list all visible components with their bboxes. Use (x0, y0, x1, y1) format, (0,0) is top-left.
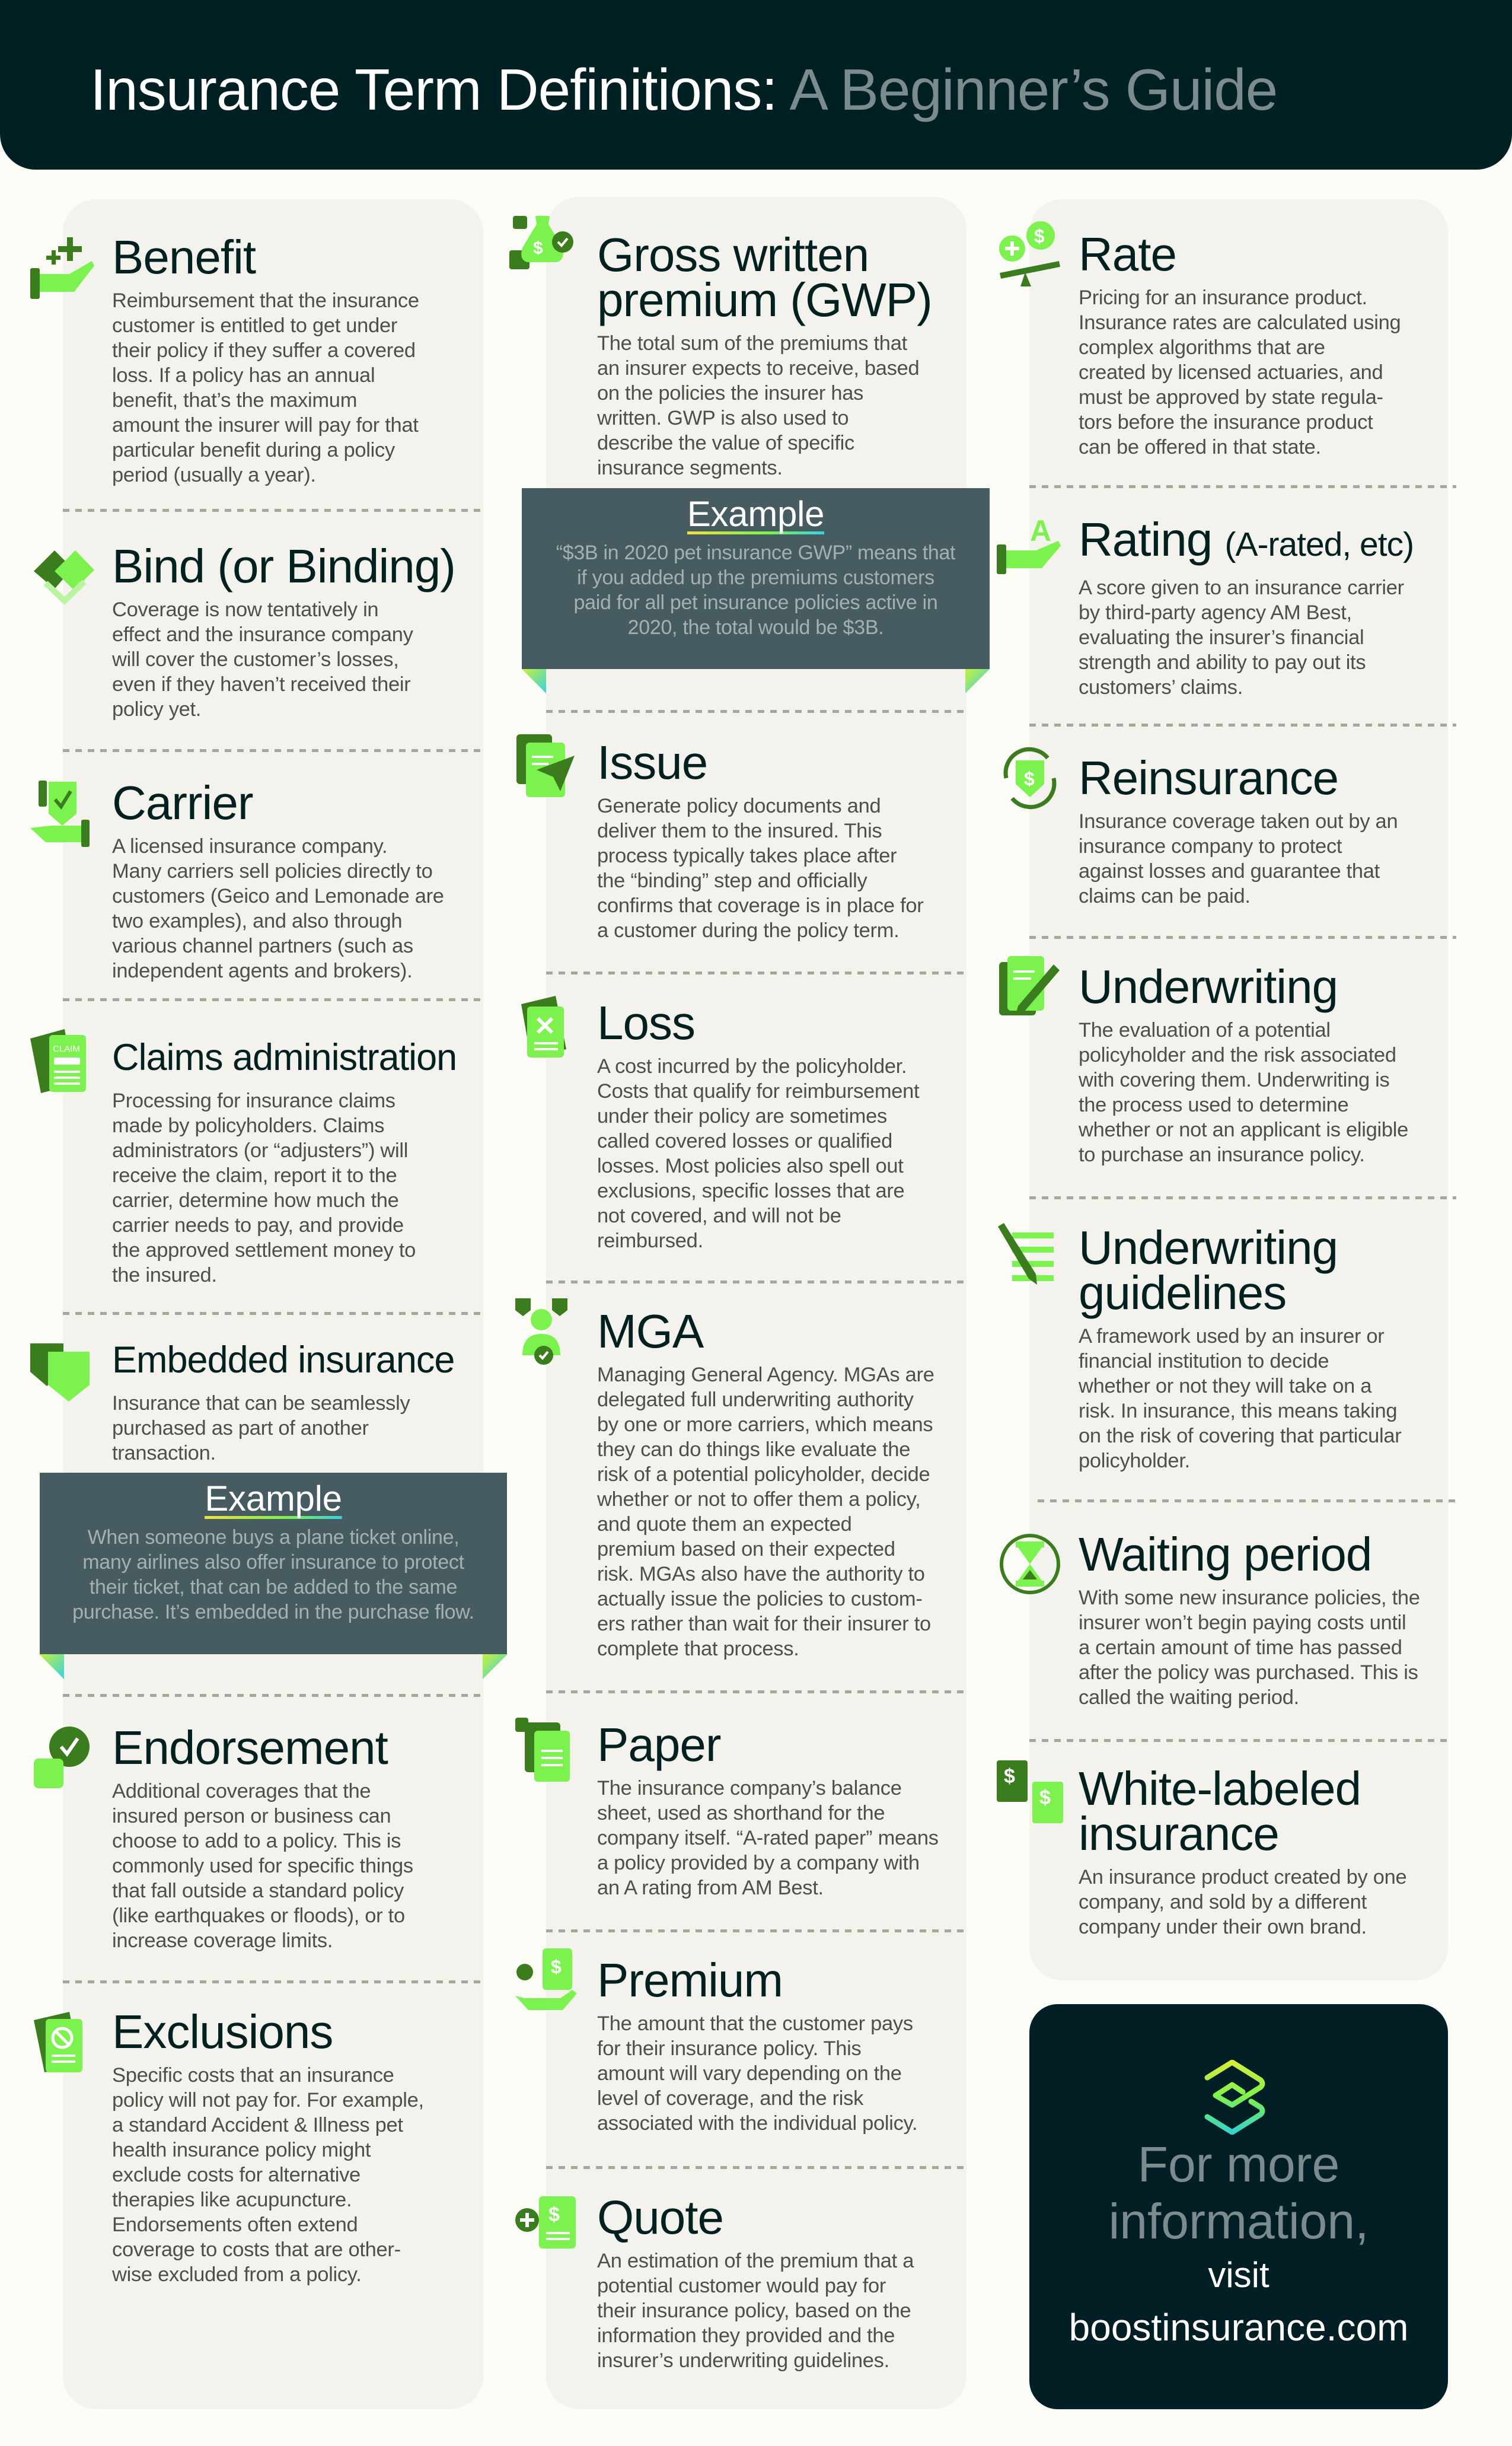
entry: Exclusions: Specific costs that an insurance (112, 2064, 394, 2087)
entry: Issue: confirms that coverage is in place for (597, 894, 923, 917)
title: Insurance Term Definitions: A Beginner’s Guide (90, 57, 1277, 122)
icon: hand with bill: $ (551, 1956, 562, 1977)
entry: Underwriting guidelines: whether or not they will take on a (1079, 1375, 1371, 1397)
text (72, 1526, 474, 1623)
entry: Rating: customers’ claims. (1079, 676, 1243, 699)
entry: Gross written premium: an insurer expects to receive, based (597, 357, 919, 380)
icon: hand with A (994, 511, 1066, 582)
text: purchase. It’s embedded in the purchase flow. (72, 1601, 474, 1623)
entry: Gross written premium: The total sum of the premiums that (597, 332, 907, 355)
icon: shields (30, 1343, 90, 1402)
entry: Gross written premium: describe the value of specific (597, 432, 854, 454)
icon: agent (515, 1298, 567, 1365)
entry: Embedded insurance: purchased as part of another (112, 1417, 369, 1439)
text: paid for all pet insurance policies active in (574, 591, 937, 614)
entry: Endorsement: choose to add to a policy. This is (112, 1830, 401, 1852)
icon: papers (515, 1718, 570, 1782)
icon: plus bill: $ (548, 2203, 560, 2226)
entry: Benefit: Benefit (112, 231, 256, 284)
entry: MGA: MGA (597, 1305, 703, 1358)
entry: Rating: Rating (A-rated, etc) (1079, 513, 1414, 566)
icon: coins scale (994, 216, 1066, 288)
icon: pen list (994, 1221, 1066, 1292)
entry: Rate: tors before the insurance product (1079, 411, 1373, 434)
entry: Loss: under their policy are sometimes (597, 1105, 887, 1128)
entry: Reinsurance: insurance company to protect (1079, 835, 1342, 858)
entry: Exclusions: therapies like acupuncture. (112, 2189, 352, 2211)
entry: Underwriting: whether or not an applicant is eligible (1079, 1119, 1408, 1141)
entry: Paper (515, 1718, 939, 1899)
entry: Claims administration: administrators (or “adjusters”) will (112, 1139, 408, 1162)
entry: Reinsurance: Reinsurance (1079, 751, 1338, 804)
entry: Carrier: A licensed insurance company. (112, 835, 387, 858)
entry: Reinsurance: claims can be paid. (1079, 885, 1251, 907)
entry: Embedded insurance: Insurance that can be seamlessly (112, 1392, 410, 1415)
text: visit: visit (1208, 2255, 1269, 2295)
icon: documents no sign (34, 2012, 82, 2072)
entry: Benefit: loss. If a policy has an annual (112, 364, 375, 387)
icon: hand with A: A (1030, 514, 1051, 547)
entry: Reinsurance: against losses and guarantee that (1079, 860, 1380, 883)
entry: Exclusions: coverage to costs that are other- (112, 2238, 401, 2261)
entry: Embedded insurance: Embedded insurance (112, 1339, 454, 1381)
entry: Endorsement: commonly used for specific things (112, 1855, 413, 1877)
entry: Claims administration: the approved settlement money to (112, 1239, 416, 1262)
entry: Reinsurance: Insurance coverage taken out by an (1079, 810, 1398, 833)
entry: Loss: reimbursed. (597, 1230, 703, 1252)
entry: Premium: level of coverage, and the risk (597, 2087, 863, 2110)
entry: Quote: potential customer would pay for (597, 2275, 886, 2297)
entry: Underwriting guidelines: financial institution to decide (1079, 1350, 1329, 1372)
entry: Paper: an A rating from AM Best. (597, 1877, 824, 1899)
entry: Claims administration: carrier, determine how much the (112, 1189, 399, 1212)
entry: Embedded insurance: transaction. (112, 1442, 216, 1464)
entry: Quote: An estimation of the premium that a (597, 2250, 914, 2272)
entry: Bind: effect and the insurance company (112, 623, 413, 646)
entry: Rate: created by licensed actuaries, and (1079, 361, 1383, 384)
entry: Claims administration: made by policyholders. Claims (112, 1114, 384, 1137)
entry: Underwriting: to purchase an insurance policy. (1079, 1144, 1365, 1166)
entry: White-labeled insurance (1079, 1766, 1406, 1939)
icon: bills (994, 1758, 1066, 1829)
entry: Bind: Coverage is now tentatively in (112, 598, 378, 621)
text: url: boostinsurance.com (1069, 2306, 1408, 2349)
icon: money bag (509, 216, 573, 269)
entry: Rate: must be approved by state regula- (1079, 386, 1383, 409)
entry: Bind (34, 540, 455, 721)
entry: Waiting period: Waiting period (1079, 1528, 1371, 1581)
icon: thumbs check (34, 1727, 90, 1788)
callout: example GWP (522, 488, 990, 669)
entry: MGA: they can do things like evaluate the (597, 1438, 910, 1461)
icon: hand with plus (30, 237, 94, 299)
entry: Benefit: Reimbursement that the insurance (112, 289, 419, 312)
entry: Paper: sheet, used as shorthand for the (597, 1802, 885, 1824)
icon: document pen (994, 953, 1066, 1024)
entry: Exclusions: policy will not pay for. For example, (112, 2089, 424, 2111)
entry: White-labeled insurance: company, and sold by a different (1079, 1891, 1367, 1913)
entry: White-labeled insurance: company under their own brand. (1079, 1916, 1367, 1938)
entry: MGA: risk of a potential policyholder, decide (597, 1463, 930, 1486)
entry: Rating: evaluating the insurer’s financial (1079, 626, 1364, 649)
entry: Waiting period: insurer won’t begin paying costs until (1079, 1611, 1406, 1634)
callout: example embedded (40, 1473, 507, 1654)
entry: Gross written premium: written. GWP is also used to (597, 407, 848, 429)
entry: Paper: The insurance company’s balance (597, 1777, 902, 1800)
entry: Rate: complex algorithms that are (1079, 336, 1325, 359)
entry: Loss: A cost incurred by the policyholder. (597, 1055, 907, 1078)
entry: Premium: for their insurance policy. This (597, 2037, 861, 2060)
entry: Claims administration: carrier needs to pay, and provide (112, 1214, 404, 1237)
entry: Issue: the “binding” step and officially (597, 870, 867, 892)
icon: coins scale: $ (1034, 225, 1045, 247)
entry: Loss: losses. Most policies also spell out (597, 1155, 904, 1177)
entry: Endorsement: Additional coverages that the (112, 1780, 371, 1802)
icon: hourglass (994, 1528, 1066, 1600)
entry: MGA: by one or more carriers, which means (597, 1413, 933, 1436)
entry: White-labeled insurance: White-labeled (1079, 1762, 1361, 1815)
icon: claim form: CLAIM (53, 1044, 80, 1054)
entry: Waiting period (1079, 1532, 1420, 1710)
entry: Endorsement: (like earthquakes or floods), or to (112, 1904, 405, 1927)
icon: handshake (34, 550, 94, 605)
entry: Underwriting guidelines (1079, 1225, 1401, 1473)
entry: Underwriting: the process used to determine (1079, 1094, 1348, 1116)
entry: Rating: by third-party agency AM Best, (1079, 601, 1352, 624)
entry: Quote: Quote (597, 2191, 723, 2244)
entry: MGA: ers rather than wait for their insurer to (597, 1613, 931, 1635)
icon: claim form (30, 1029, 86, 1093)
entry: Bind: policy yet. (112, 698, 201, 721)
entry: Underwriting guidelines: A framework used by an insurer or (1079, 1325, 1385, 1348)
callout: for more information (1029, 2004, 1448, 2409)
entry: Issue: Issue (597, 736, 707, 789)
entry: Claims administration: receive the claim, report it to the (112, 1164, 397, 1187)
entry: Issue (516, 734, 924, 942)
text: many airlines also offer insurance to protect (82, 1551, 464, 1574)
entry: Benefit (30, 231, 419, 486)
entry: Exclusions: wise excluded from a policy. (112, 2263, 361, 2286)
entry: Rating: A score given to an insurance carrier (1079, 577, 1404, 599)
entry: Underwriting (1079, 964, 1408, 1167)
heading: Example: Example (687, 494, 824, 534)
entry: Carrier: Many carriers sell policies directly to (112, 860, 432, 883)
entry: Benefit: particular benefit during a policy (112, 439, 395, 461)
entry: Premium: The amount that the customer pays (597, 2012, 913, 2035)
entry: Bind: Bind (or Binding) (112, 540, 455, 593)
icon: document send (516, 734, 575, 797)
panel: column 3 (1029, 199, 1448, 1980)
entry: Underwriting guidelines: guidelines (1079, 1266, 1286, 1319)
entry: Exclusions (34, 2005, 424, 2286)
entry: Rate (1079, 232, 1401, 460)
icon: bills: $ (1004, 1765, 1015, 1788)
icon: shield dollar cycle (994, 743, 1066, 814)
entry: Benefit: amount the insurer will pay for that (112, 414, 419, 437)
entry: Rating (1079, 517, 1414, 700)
entry: Embedded insurance (30, 1339, 454, 1464)
entry: Issue: process typically takes place after (597, 845, 897, 867)
entry: MGA: delegated full underwriting authority (597, 1388, 914, 1411)
entry: Bind: even if they haven’t received their (112, 673, 410, 696)
entry: Underwriting: Underwriting (1079, 960, 1338, 1013)
entry: MGA: Managing General Agency. MGAs are (597, 1364, 934, 1386)
entry: Issue: Generate policy documents and (597, 795, 881, 817)
entry: Benefit: their policy if they suffer a covered (112, 339, 416, 362)
text: “$3B in 2020 pet insurance GWP” means that (556, 542, 955, 564)
entry: Claims administration: Claims administration (112, 1037, 457, 1078)
entry: Exclusions: Endorsements often extend (112, 2213, 358, 2236)
entry: Waiting period: after the policy was purchased. This is (1079, 1661, 1418, 1684)
entry: Claims administration: the insured. (112, 1264, 217, 1286)
entry: MGA: complete that process. (597, 1638, 799, 1660)
entry: Paper: company itself. “A-rated paper” means (597, 1827, 939, 1849)
entry: Underwriting guidelines: on the risk of covering that particular (1079, 1425, 1401, 1447)
entry: Gross written premium: premium (GWP) (597, 273, 932, 326)
entry: White-labeled insurance: insurance (1079, 1807, 1279, 1860)
entry: Exclusions: exclude costs for alternative (112, 2164, 361, 2186)
entry: Carrier: Carrier (112, 776, 253, 829)
entry: Issue: deliver them to the insured. This (597, 820, 882, 842)
entry: Gross written premium: on the policies the insurer has (597, 382, 863, 405)
entry: MGA (515, 1298, 934, 1660)
entry: Premium: associated with the individual policy. (597, 2112, 917, 2135)
entry: Gross written premium: insurance segments. (597, 457, 783, 479)
text: for more information: information, (1109, 2193, 1369, 2249)
entry: Rating: strength and ability to pay out its (1079, 651, 1366, 674)
entry: Endorsement: increase coverage limits. (112, 1929, 333, 1952)
entry: Underwriting guidelines: risk. In insurance, this means taking (1079, 1400, 1397, 1422)
entry: MGA: whether or not to offer them a policy, (597, 1488, 920, 1511)
icon: boost logo (1201, 2060, 1276, 2135)
entry: Waiting period: called the waiting period. (1079, 1686, 1299, 1709)
entry: MGA: and quote them an expected (597, 1513, 852, 1536)
entry: Gross written premium (509, 216, 932, 479)
entry: Endorsement (34, 1721, 413, 1952)
entry: Benefit: customer is entitled to get under (112, 314, 397, 337)
entry: White-labeled insurance: An insurance product created by one (1079, 1866, 1406, 1888)
entry: Premium: Premium (597, 1954, 783, 2007)
entry: Underwriting: policyholder and the risk associated (1079, 1044, 1396, 1066)
entry: Rate: can be offered in that state. (1079, 436, 1321, 458)
text: 2020, the total would be $3B. (628, 616, 883, 639)
entry: Bind: will cover the customer’s losses, (112, 648, 398, 671)
entry: Benefit: period (usually a year). (112, 464, 316, 486)
entry: Paper: Paper (597, 1718, 720, 1771)
entry: Paper: a policy provided by a company with (597, 1852, 920, 1874)
entry: Endorsement: that fall outside a standard policy (112, 1880, 404, 1902)
entry: Premium: amount will vary depending on the (597, 2062, 902, 2085)
entry: Loss: called covered losses or qualified (597, 1130, 892, 1152)
entry: Claims administration: Processing for insurance claims (112, 1090, 395, 1112)
text: for more information (1029, 2136, 1448, 2250)
entry: Carrier: independent agents and brokers). (112, 960, 412, 982)
text: When someone buys a plane ticket online, (88, 1526, 459, 1549)
entry: Rate: Insurance rates are calculated using (1079, 311, 1401, 334)
entry: Underwriting: with covering them. Underwriting is (1079, 1069, 1389, 1091)
entry: Loss (521, 996, 919, 1252)
icon: bills: $ (1039, 1786, 1051, 1809)
entry: Carrier: customers (Geico and Lemonade are (112, 885, 444, 907)
icon: money bag: $ (533, 238, 543, 258)
entry: Carrier: various channel partners (such as (112, 935, 413, 957)
text: for more information: For more (1138, 2136, 1339, 2192)
icon: documents x (521, 996, 566, 1058)
entry: Waiting period: With some new insurance policies, the (1079, 1587, 1420, 1609)
entry: Benefit: benefit, that’s the maximum (112, 389, 357, 412)
entry: Loss: exclusions, specific losses that are (597, 1180, 904, 1202)
entry: Loss: Loss (597, 996, 695, 1049)
entry: MGA: risk. MGAs also have the authority to (597, 1563, 925, 1585)
icon: plus bill (513, 2184, 584, 2256)
entry: Underwriting guidelines: Underwriting (1079, 1221, 1338, 1274)
entry: Loss: Costs that qualify for reimbursement (597, 1080, 919, 1103)
entry: Quote: insurer’s underwriting guidelines. (597, 2349, 889, 2372)
entry: Premium (515, 1948, 917, 2135)
entry: Endorsement: Endorsement (112, 1721, 388, 1774)
icon: shield dollar cycle: $ (1024, 768, 1035, 789)
entry: Waiting period: a certain amount of time has passed (1079, 1636, 1402, 1659)
text: their ticket, that can be added to the same (90, 1576, 457, 1598)
entry: Carrier: two examples), and also through (112, 910, 402, 932)
icon: shield in hand (30, 781, 90, 847)
panel: column 1 (63, 199, 483, 2409)
entry: Issue: a customer during the policy term. (597, 919, 899, 942)
entry: Loss: not covered, and will not be (597, 1205, 841, 1227)
entry: Reinsurance (1079, 756, 1398, 909)
entry: MGA: premium based on their expected (597, 1538, 895, 1560)
entry: Carrier (30, 776, 444, 982)
entry: Endorsement: insured person or business can (112, 1805, 391, 1827)
entry: Exclusions: Exclusions (112, 2005, 333, 2058)
entry: Rate: Rate (1079, 228, 1176, 281)
header (0, 0, 1512, 170)
entry: Quote: information they provided and the (597, 2324, 895, 2347)
entry: Quote: their insurance policy, based on the (597, 2300, 911, 2322)
heading: Example: Example (205, 1479, 342, 1518)
entry: Exclusions: a standard Accident & Illness pet (112, 2114, 403, 2136)
text: if you added up the premiums customers (577, 566, 934, 589)
entry: Exclusions: health insurance policy might (112, 2139, 371, 2161)
text (556, 542, 956, 639)
entry: MGA: actually issue the policies to custom- (597, 1588, 923, 1610)
entry: Quote (515, 2191, 914, 2372)
icon: hand with bill (515, 1948, 577, 2010)
entry: Gross written premium: Gross written (597, 228, 869, 281)
entry: Claims administration (30, 1029, 457, 1286)
entry: Rate: Pricing for an insurance product. (1079, 286, 1367, 309)
panel: column 2 (546, 197, 966, 2409)
entry: Underwriting guidelines: policyholder. (1079, 1450, 1190, 1472)
entry: Underwriting: The evaluation of a potential (1079, 1019, 1331, 1042)
